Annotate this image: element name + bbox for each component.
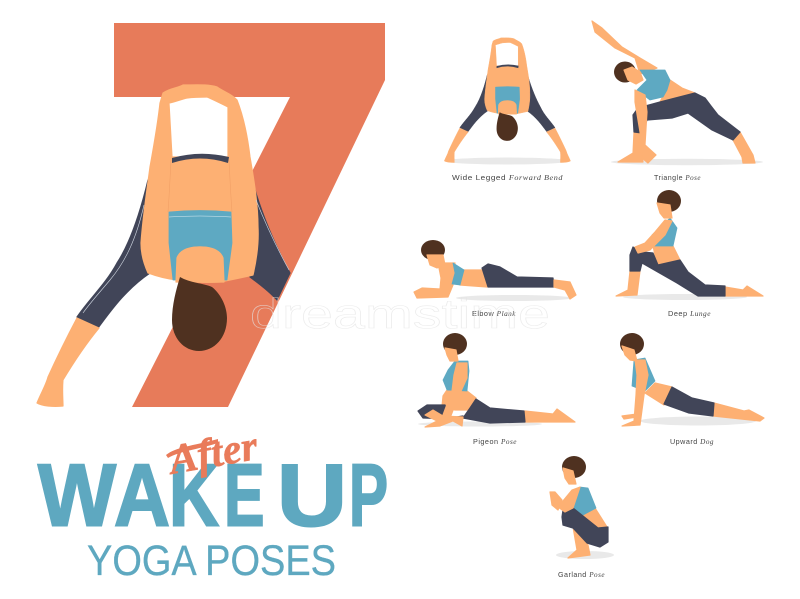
leggings [630,247,725,296]
top [637,70,670,100]
face [427,255,445,268]
head hair [614,62,636,82]
front shin and hand [425,410,463,427]
leggings [482,264,554,287]
leggings [562,508,608,547]
hands [550,492,562,510]
head hair [421,240,445,260]
title: WAKE UP: K [169,446,219,544]
top seam [169,216,231,217]
waistband [172,154,229,163]
title: After [163,423,262,484]
large orange number 7 [114,23,385,407]
shadow [445,158,569,164]
face [624,67,643,84]
raised arm [592,21,657,74]
face [445,348,458,361]
midriff [442,390,476,410]
pose: wide legged forward bend [444,38,570,164]
lower leg [713,403,764,421]
arm [635,220,672,253]
top [443,361,469,391]
pose: deep lunge [616,190,763,300]
pose: pigeon [418,333,575,427]
head hair [620,333,644,355]
foot [554,280,576,299]
label: garland: Garland Pose [558,570,605,579]
label: triangle: Triangle Pose [654,173,701,182]
back skin [580,508,607,530]
title: WAKE UP: W [38,446,116,544]
main figure: wide legged forward bend [37,85,290,406]
shadow [456,295,572,301]
label: elbow plank: Elbow Plank [472,309,516,318]
title: WAKE UP: E [224,446,264,544]
figure [444,38,570,163]
title: WAKE UP: U [277,446,347,544]
face [563,468,576,484]
top [452,263,464,285]
head hair [562,456,586,478]
arms and torso [141,85,258,282]
title: WAKE UP: A [114,446,170,544]
blue sports top [169,210,232,280]
label: wide legged forward bend: Wide Legged Forward Bend [452,173,563,182]
back shin [733,132,755,163]
shadow [418,422,542,426]
midriff [460,270,487,287]
leggings [633,93,740,140]
front shin [616,271,640,296]
back foot [725,286,763,296]
arm [622,360,648,426]
face [657,203,672,218]
head hair [172,277,227,351]
midriff [645,383,672,405]
label: upward dog: Upward Dog [670,437,714,446]
legging seams [83,200,289,313]
leggings [664,387,714,416]
word After: After [163,423,262,484]
top [632,358,655,391]
left shin and foot [37,318,99,406]
midriff [660,80,695,102]
label: pigeon: Pigeon Pose [473,437,517,446]
left leg legging [77,180,150,328]
shadow [623,294,747,300]
right leg legging [250,183,290,300]
label: deep lunge: Deep Lunge [668,309,711,318]
shadow [640,416,756,426]
swash [166,439,218,458]
leggings bent leg [418,405,463,419]
title: YOGA POSES: YOGA POSES [87,537,336,585]
shadow [556,551,614,559]
foot and lower leg [525,409,575,422]
supporting arm [635,90,656,163]
midriff [653,246,680,265]
pose: triangle [592,21,763,165]
shadow [611,159,763,165]
pose: garland [550,456,614,559]
top [652,218,677,246]
arm seams [168,160,232,212]
title: WAKE UP: P [349,446,388,544]
arm and shoulder [414,263,455,298]
head hair [657,190,681,212]
front shin and foot [618,132,643,162]
leggings back leg [463,399,525,423]
shin and foot [568,527,590,558]
arm [558,487,580,512]
pose: elbow plank [414,240,576,301]
head hair [443,333,467,355]
watermark: dreamstime [250,290,550,337]
other hand [622,414,637,419]
top [573,487,596,515]
neck [176,247,224,282]
face [622,346,637,361]
pose: upward dog [620,333,764,426]
arm [443,363,467,418]
